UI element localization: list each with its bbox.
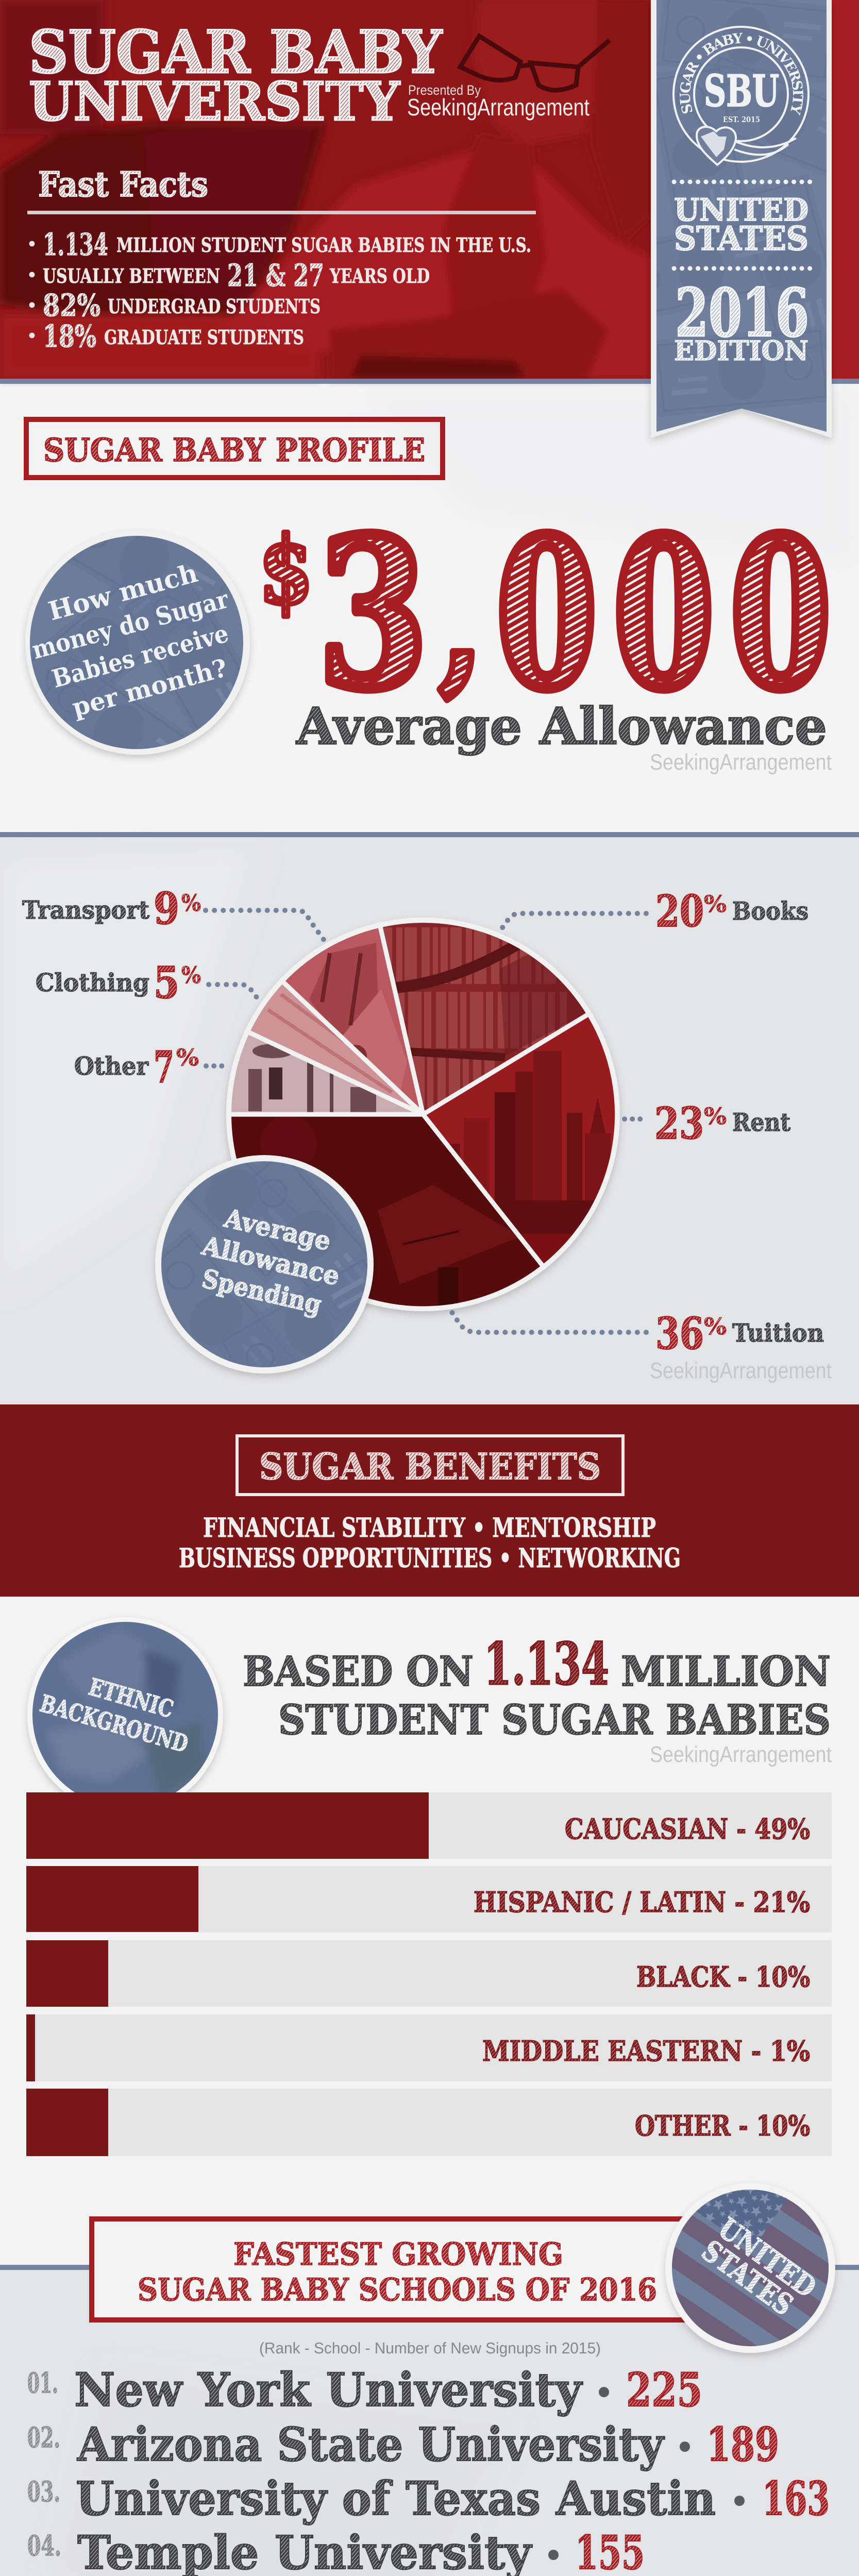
pie label: clothing: Clothing [36, 969, 149, 997]
title: SUGAR BABY [29, 18, 443, 87]
pie label: other: % [176, 1045, 199, 1071]
slice: tuition 36% [231, 1117, 540, 1307]
rank 2: Arizona State University [77, 2417, 665, 2472]
pie label: books [501, 886, 809, 937]
pie label: clothing: 5 [154, 957, 179, 1008]
bar chart: ethnic background [26, 1792, 832, 2156]
2016 edition text: 2016 [675, 275, 809, 352]
rank 1: New York University [74, 2363, 583, 2417]
based on 1.134 million heading: BASED ON [243, 1647, 474, 1696]
fact: student count: MILLION STUDENT SUGAR BABIES IN THE U.S. [116, 233, 531, 257]
bar: other 10% [26, 2089, 832, 2156]
blue stripe [0, 2265, 859, 2270]
fact: age range [29, 258, 430, 293]
benefits list: FINANCIAL STABILITY • MENTORSHIP [203, 1513, 656, 1544]
blue stripe [0, 832, 859, 837]
based on 1.134 million heading [243, 1631, 831, 1744]
bar: caucasian 49% [26, 1792, 832, 1859]
dotted divider [674, 179, 811, 184]
sugar baby profile heading [26, 419, 443, 478]
2016 edition text: EDITION [674, 335, 809, 367]
bar: black 10%: BLACK - 10% [636, 1960, 810, 1993]
glasses [460, 36, 610, 90]
slice dividers [227, 922, 591, 1269]
rank 3: 03. [27, 2475, 60, 2508]
ribbon: United States 2016 edition [648, 0, 835, 442]
fact: undergrad [29, 287, 321, 323]
pie label: clothing [36, 957, 258, 1008]
pie label: tuition: Tuition [732, 1319, 824, 1348]
pie label: rent [625, 1098, 790, 1149]
presented by logo: Presented By [408, 82, 481, 98]
fastest growing heading box: FASTEST GROWING [233, 2236, 563, 2273]
pie label: clothing: % [181, 962, 201, 989]
fact: age range: 21 & 27 [227, 258, 324, 293]
seal logo: SBU [704, 65, 779, 116]
pie label: other: 7 [154, 1042, 174, 1093]
United States text: STATES [674, 219, 809, 258]
fast facts list [29, 227, 531, 354]
fact: undergrad: UNDERGRAD STUDENTS [108, 295, 321, 318]
watermark: SeekingArrangement [650, 1358, 832, 1383]
based on 1.134 million heading: MILLION [621, 1647, 831, 1696]
sugar benefits band [0, 1404, 859, 1597]
bar: black 10% [26, 1940, 832, 2007]
fact: student count: 1.134 [43, 227, 108, 262]
pie label: tuition: 36 [655, 1308, 704, 1359]
circle: united states flag [662, 2190, 838, 2359]
fastest growing heading box: SUGAR BABY SCHOOLS OF 2016 [138, 2272, 657, 2308]
slice: clothing 5% [250, 984, 411, 1106]
circle: united states flag: UNITED [712, 2211, 822, 2304]
pie label: tuition [452, 1308, 824, 1359]
fact: undergrad: 82% [43, 287, 100, 323]
$3,000: 0 [496, 495, 597, 734]
$3,000: $ [259, 516, 313, 625]
rank 3: 163 [762, 2471, 830, 2526]
pie label: books: Books [732, 897, 809, 926]
benefits list [179, 1513, 681, 1574]
average allowance: Average Allowance [296, 697, 827, 756]
pie label: other: Other [74, 1052, 149, 1081]
rank 1: 225 [626, 2363, 702, 2417]
pie label: other [74, 1042, 229, 1093]
$3,000: , [438, 535, 484, 710]
pie label: books: % [704, 891, 727, 918]
pie label: tuition: % [704, 1314, 727, 1340]
circle: ethnic background: ETHNIC [86, 1673, 177, 1723]
top five schools [27, 2363, 830, 2576]
blue stripe under header [0, 379, 859, 384]
circle: how much money: money do Sugar [29, 585, 232, 665]
circle: how much money: How much [45, 557, 201, 626]
sugar benefits heading box: SUGAR BENEFITS [259, 1445, 601, 1488]
presented by logo: SeekingArrangement [407, 94, 589, 121]
circle: how much money [22, 536, 253, 761]
rank legend: (Rank - School - Number of New Signups in 2015) [259, 2339, 601, 2357]
seal logo: SUGAR • BABY • UNIVERSITY [679, 33, 804, 115]
sugar benefits heading box [237, 1436, 623, 1495]
pie label: transport: Transport [22, 896, 149, 925]
presented by logo [407, 82, 589, 121]
fact: graduate [29, 318, 304, 354]
bar: other 10%: OTHER - 10% [635, 2109, 810, 2142]
rank 2: 189 [706, 2417, 779, 2472]
fact: age range: USUALLY BETWEEN [43, 264, 220, 287]
slice: rent 23% [427, 1017, 615, 1263]
circle: ethnic background: BACKGROUND [37, 1689, 191, 1758]
circle: average allowance spending: Allowance [199, 1230, 343, 1292]
fastest growing heading box [92, 2219, 695, 2320]
circle: average allowance spending: Spending [199, 1263, 325, 1320]
title [29, 18, 443, 133]
fact: age range: YEARS OLD [329, 264, 430, 287]
circle: how much money: per month? [69, 653, 230, 722]
circle: united states flag: STATES [695, 2233, 800, 2323]
fact: graduate: GRADUATE STUDENTS [104, 326, 304, 349]
circle: average allowance spending: Average [221, 1202, 334, 1257]
title: UNIVERSITY [29, 71, 400, 133]
slice: transport 9% [285, 928, 419, 1108]
pie chart: average allowance spending [222, 917, 629, 1319]
bar: hispanic 21% [26, 1866, 832, 1933]
United States text: UNITED [674, 192, 809, 228]
$3,000 [259, 495, 831, 734]
pie label: transport: 9 [154, 883, 179, 934]
pie label: transport [22, 883, 326, 942]
fact: student count [29, 227, 531, 262]
$3,000: 3 [318, 495, 428, 734]
header photo panel [0, 0, 859, 379]
based on 1.134 million heading: 1.134 [484, 1631, 609, 1698]
$3,000: 0 [613, 495, 714, 734]
circle: how much money: Babies receive [49, 619, 231, 694]
pie label: rent: % [704, 1104, 727, 1130]
dotted divider [674, 266, 811, 271]
rank 1: 01. [27, 2366, 58, 2399]
bar: middle eastern 1% [26, 2014, 832, 2081]
bar: hispanic 21%: HISPANIC / LATIN - 21% [474, 1886, 810, 1919]
benefits list: BUSINESS OPPORTUNITIES • NETWORKING [179, 1543, 681, 1574]
circle: ethnic background [24, 1622, 226, 1792]
seal logo [672, 26, 810, 166]
fast facts rule [27, 211, 536, 214]
United States text [674, 192, 809, 258]
rank 4: 04. [27, 2529, 61, 2562]
2016 edition text [674, 275, 809, 367]
pie label: rent: Rent [732, 1108, 790, 1137]
fast facts heading: Fast Facts [38, 164, 208, 205]
fact: graduate: 18% [43, 318, 96, 354]
pie label: transport: % [181, 890, 201, 917]
pie label: rent: 23 [654, 1098, 704, 1149]
pie label: books: 20 [655, 886, 704, 937]
sugar baby profile heading: SUGAR BABY PROFILE [43, 431, 425, 469]
rank 2: 02. [27, 2421, 60, 2454]
watermark: SeekingArrangement [650, 750, 832, 775]
bar: caucasian 49%: CAUCASIAN - 49% [565, 1812, 810, 1845]
circle: average allowance spending [153, 1155, 374, 1380]
watermark: SeekingArrangement [650, 1742, 832, 1767]
slice: other 7% [231, 1035, 413, 1112]
seal logo: EST. 2015 [723, 115, 760, 124]
rank 3: University of Texas Austin [76, 2471, 716, 2526]
bar: middle eastern 1%: MIDDLE EASTERN - 1% [482, 2035, 810, 2067]
slice: books 20% [382, 923, 586, 1111]
